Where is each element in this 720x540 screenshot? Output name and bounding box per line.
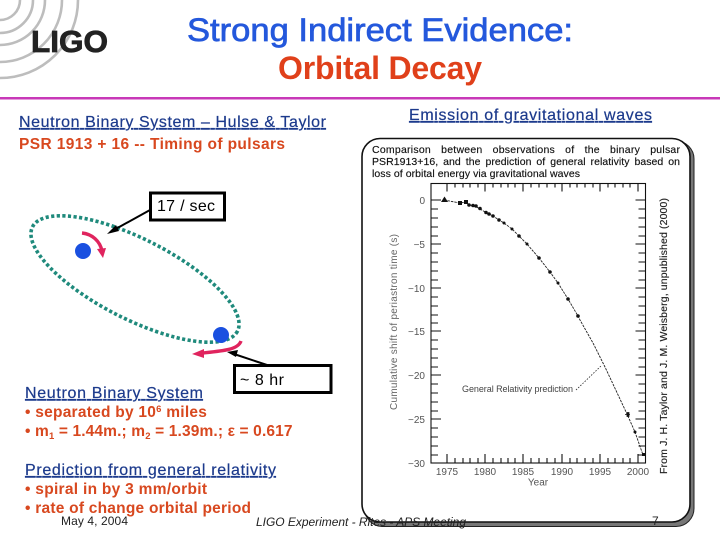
x axis tick labels: 2000	[627, 467, 650, 478]
panel caption	[372, 144, 680, 180]
text block: prediction from general relativity	[25, 462, 276, 517]
x axis tick labels: 1990	[551, 467, 574, 478]
callout: 8 hr: ~ 8 hr	[240, 372, 285, 389]
callout: 17 / sec: 17 / sec	[157, 198, 215, 215]
heading: neutron binary system, Hulse and Taylor: PSR 1913 + 16 -- Timing of pulsars	[19, 136, 285, 153]
title: Strong Indirect Evidence:	[187, 12, 573, 48]
vertical credit text: From J. H. Taylor and J. M. Weisberg, unpublished (2000)	[658, 198, 670, 474]
x axis tick labels: 1975	[436, 467, 459, 478]
text block: prediction from general relativity: • spiral in by 3 mm/orbit	[25, 481, 207, 498]
text block: neutron binary system facts: 2	[145, 431, 151, 442]
callout: 8 hr	[227, 350, 331, 392]
title: Orbital Decay	[278, 50, 482, 86]
x axis tick labels: 1985	[512, 467, 535, 478]
x axis label: Year	[528, 478, 549, 488]
title	[187, 12, 573, 86]
neutron star: upper	[75, 243, 91, 259]
elliptical orbit	[14, 191, 256, 367]
x axis tick labels: 1980	[474, 467, 497, 478]
text block: neutron binary system facts: • separated by 10	[25, 404, 156, 421]
y axis tick labels: −5	[414, 240, 425, 251]
y axis tick labels: −30	[408, 459, 425, 470]
x axis tick labels: 1995	[589, 467, 612, 478]
text block: prediction from general relativity: Prediction from general relativity	[25, 462, 276, 479]
panel caption: loss of orbital energy via gravitational waves	[372, 168, 580, 180]
icon: LIGO logo	[0, 0, 108, 78]
panel frame	[362, 138, 694, 526]
annotation: general relativity prediction: General Relativity prediction	[462, 384, 573, 394]
text block: neutron binary system facts	[25, 385, 293, 442]
arrow: lower orbital motion	[192, 341, 241, 358]
y axis tick labels	[408, 196, 425, 470]
text block: neutron binary system facts: • m	[25, 423, 49, 440]
footer	[61, 514, 659, 529]
text block: neutron binary system facts: miles	[162, 404, 207, 421]
arrow: upper orbital motion	[82, 233, 106, 258]
panel caption: Comparison between observations of the binary pulsar	[372, 144, 680, 156]
y axis tick labels: −10	[408, 284, 425, 295]
y axis tick labels: −15	[408, 327, 425, 338]
panel caption: PSR1913+16, and the prediction of general relativity based on	[372, 156, 680, 168]
x axis tick labels	[436, 467, 650, 478]
plot frame	[431, 184, 646, 463]
text block: neutron binary system facts: = 1.39m.; ε = 0.617	[151, 423, 293, 440]
footer: 7	[652, 514, 659, 528]
annotation: general relativity prediction	[462, 366, 601, 394]
neutron star: lower	[213, 327, 229, 343]
heading: neutron binary system, Hulse and Taylor: Neutron Binary System – Hulse & Taylor	[19, 114, 327, 131]
panel: pulsar timing chart	[362, 138, 694, 526]
line chart: cumulative shift of periastron time	[389, 184, 650, 488]
prediction curve	[444, 200, 643, 455]
footer: May 4, 2004	[61, 514, 128, 528]
heading: emission of gravitational waves: Emission of gravitational waves	[409, 107, 652, 124]
y axis tick labels: 0	[419, 196, 425, 207]
footer: LIGO Experiment - Rites - APS Meeting	[256, 515, 466, 529]
orbit diagram	[14, 191, 256, 367]
header divider	[0, 97, 720, 100]
callout: 17 / sec	[107, 193, 224, 234]
y axis tick labels: −25	[408, 415, 425, 426]
text block: neutron binary system facts: 1	[49, 431, 55, 442]
text block: neutron binary system facts: = 1.44m.; m	[54, 423, 145, 440]
observation data points	[441, 196, 645, 456]
y axis tick labels: −20	[408, 371, 425, 382]
text block: neutron binary system facts: Neutron Binary System	[25, 385, 203, 402]
icon: LIGO logo: LIGO	[31, 24, 108, 59]
y axis label: Cumulative shift of periastron time (s)	[389, 234, 400, 410]
text block: neutron binary system facts: 6	[156, 404, 162, 415]
heading: neutron binary system, Hulse and Taylor	[19, 114, 327, 153]
text block: prediction from general relativity: • rate of change orbital period	[25, 500, 251, 517]
